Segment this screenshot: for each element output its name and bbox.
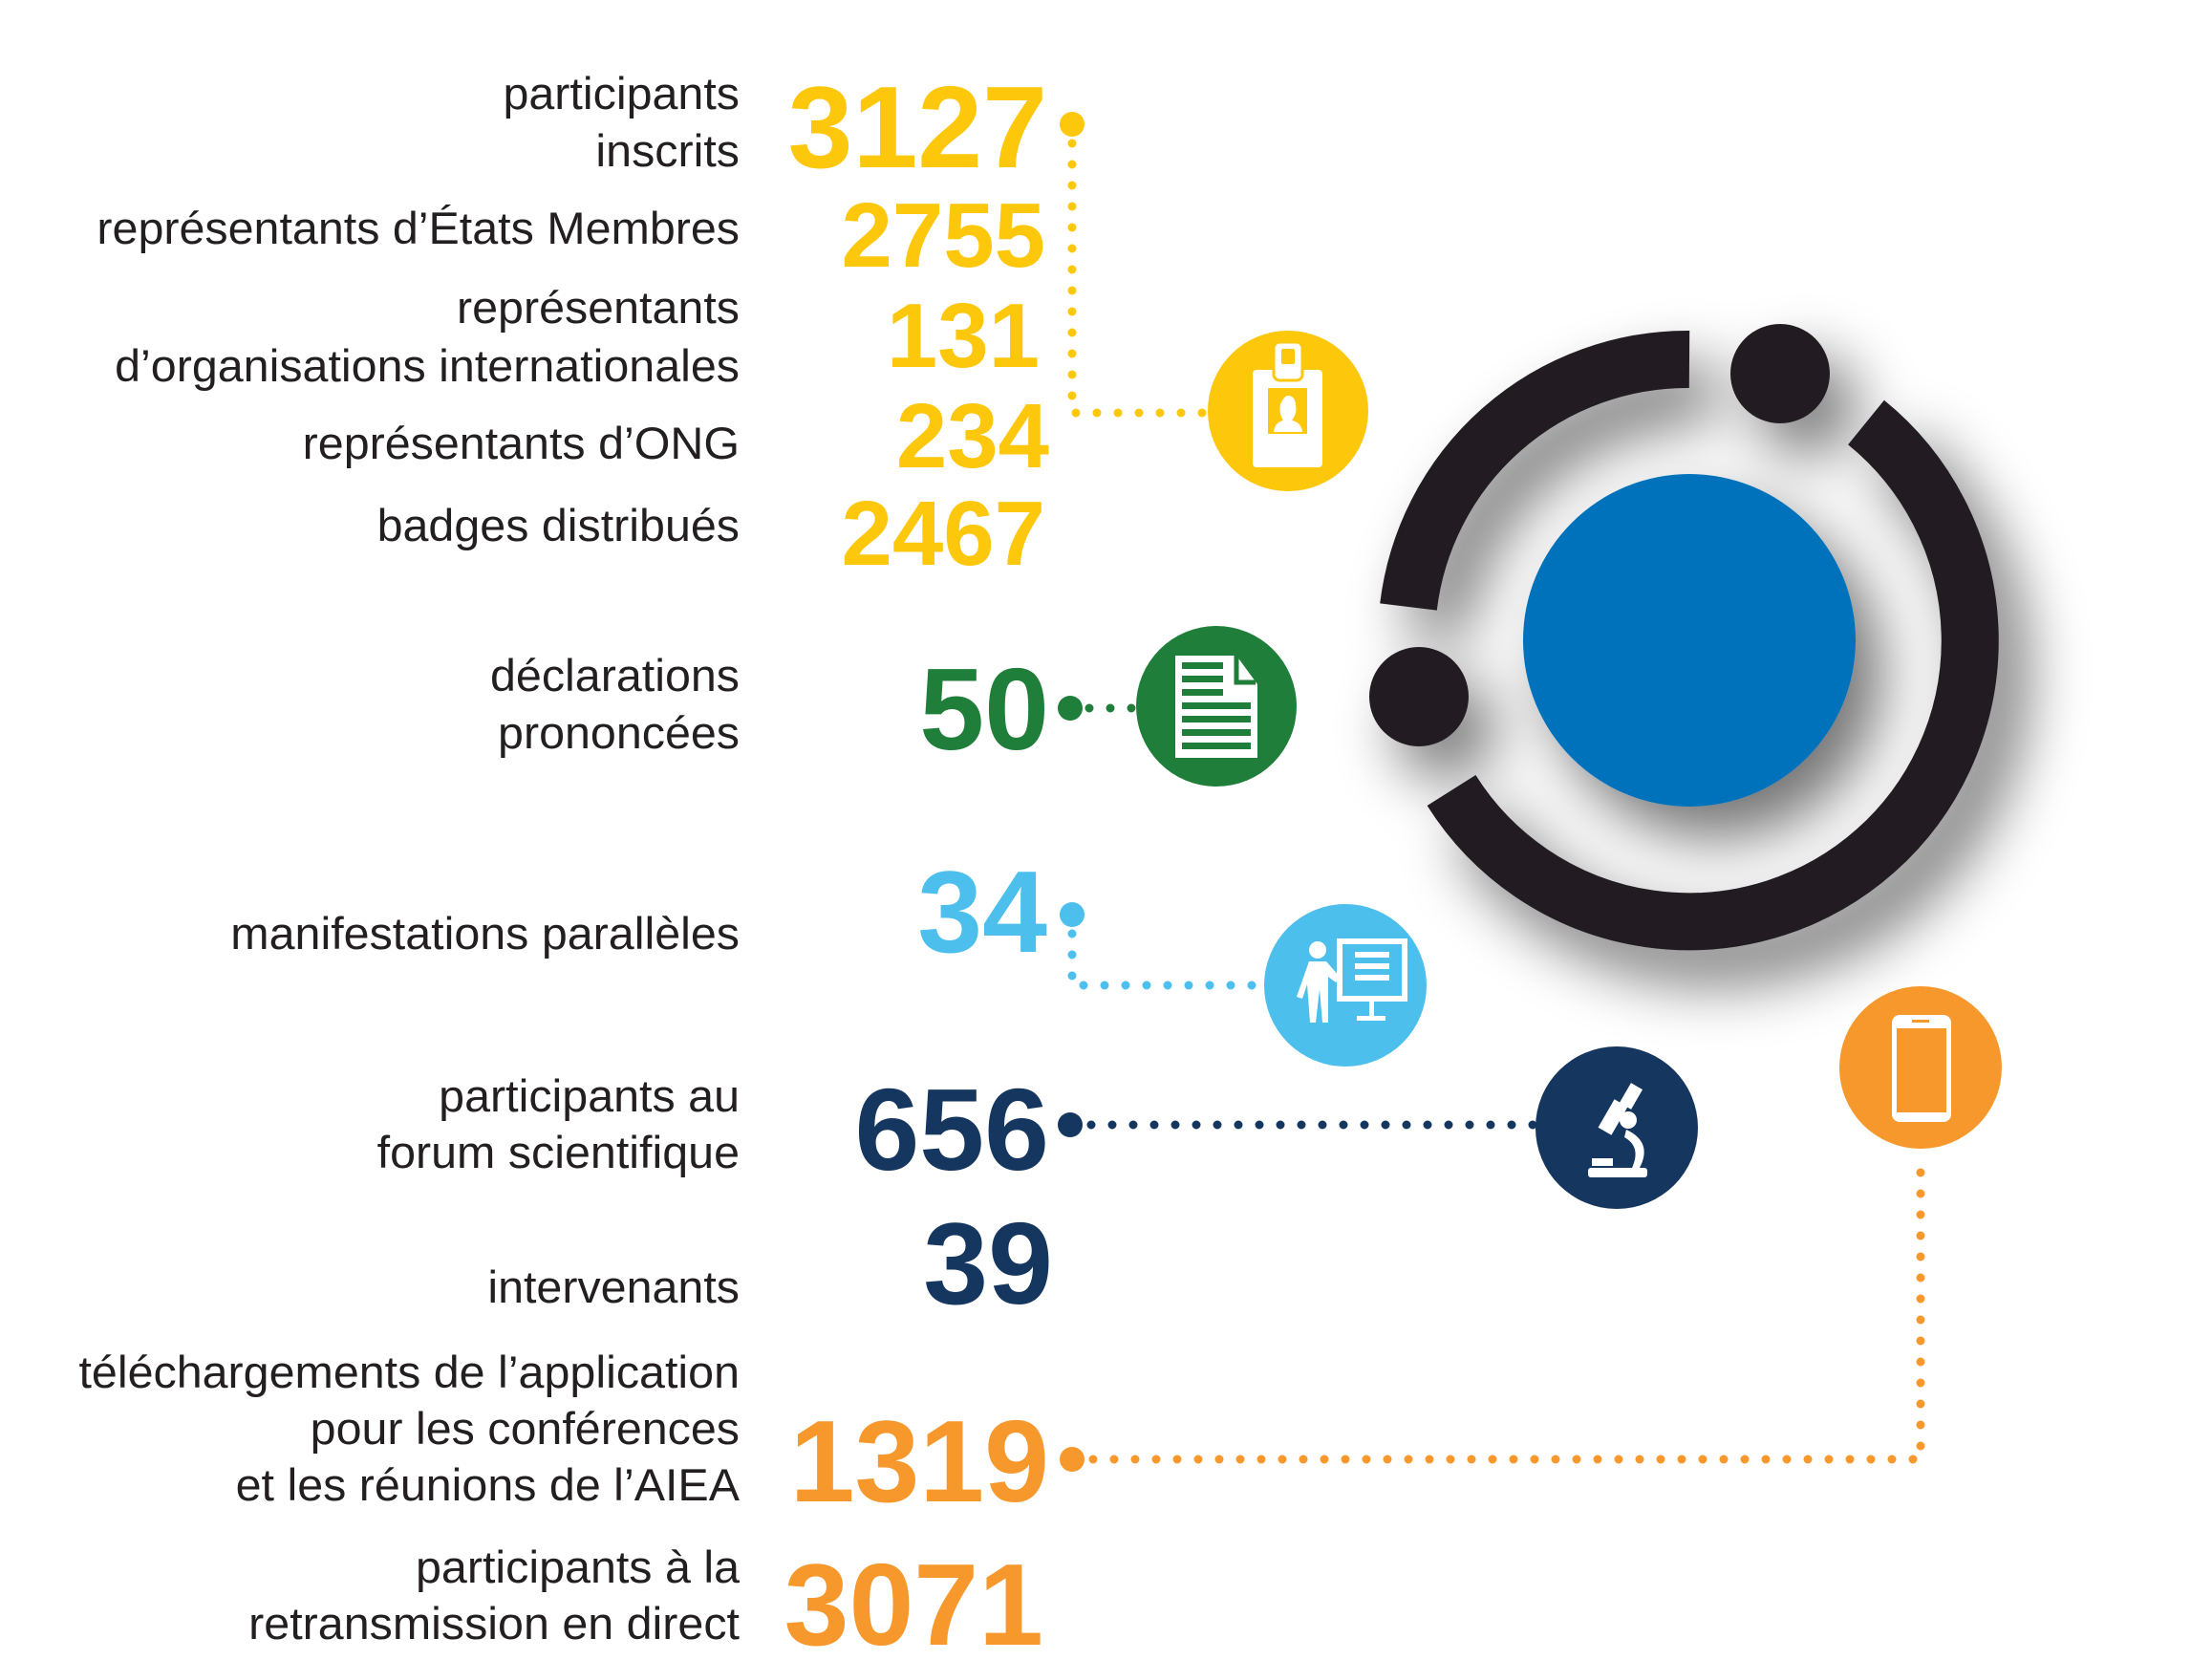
number: 2755: 2755 — [841, 184, 1045, 287]
number: 34: 34 — [917, 847, 1047, 977]
number: 656: 656 — [854, 1065, 1049, 1195]
label: téléchargements de l'application: pour les conférences — [311, 1405, 740, 1455]
label: représentants d'organisations internationales — [115, 284, 740, 392]
number: 3127: 3127 — [788, 62, 1047, 192]
label: représentants d'organisations internationales: d’organisations internationales — [115, 342, 740, 392]
label: participants inscrits: inscrits — [595, 127, 740, 177]
number: 1319: 1319 — [790, 1396, 1049, 1526]
connector: green — [1058, 696, 1137, 721]
number: 2467: 2467 — [841, 483, 1045, 585]
label: téléchargements de l'application — [78, 1348, 740, 1511]
label: téléchargements de l'application: téléchargements de l’application — [78, 1348, 740, 1398]
label: participants inscrits: participants — [503, 70, 740, 119]
blue center — [1523, 474, 1856, 807]
number: 39: 39 — [923, 1198, 1053, 1328]
dot left — [1369, 647, 1469, 746]
connector: navy — [1058, 1112, 1535, 1137]
label: participants au forum scientifique: participants au — [439, 1072, 740, 1122]
number: 50: 50 — [919, 644, 1049, 774]
label: badges distribués: badges distribués — [377, 502, 740, 551]
icon: smartphone (orange) — [1839, 986, 2002, 1149]
connector: orange — [1060, 1160, 1921, 1472]
label: déclarations prononcées — [490, 652, 740, 759]
number: 131: 131 — [887, 285, 1040, 387]
label: déclarations prononcées: prononcées — [498, 709, 740, 759]
label: participants à la retransmission en direct: participants à la — [416, 1543, 740, 1593]
label: intervenants: intervenants — [487, 1263, 740, 1313]
label: participants à la retransmission en direct: retransmission en direct — [248, 1600, 740, 1649]
label: participants à la retransmission en direct — [248, 1543, 740, 1649]
icon: presenter (light blue) — [1264, 904, 1427, 1067]
label: téléchargements de l'application: et les réunions de l’AIEA — [236, 1461, 740, 1511]
label: participants au forum scientifique: forum scientifique — [377, 1129, 740, 1178]
label: représentants d'ONG: représentants d’ONG — [303, 420, 740, 469]
label: manifestations parallèles: manifestations parallèles — [230, 910, 740, 959]
label: représentants d'États Membres: représentants d’États Membres — [97, 205, 740, 254]
label: représentants d'organisations internationales: représentants — [457, 284, 740, 334]
icon: microscope (navy) — [1536, 1046, 1698, 1209]
label: participants inscrits — [503, 70, 740, 177]
dot top — [1730, 324, 1830, 423]
label: déclarations prononcées: déclarations — [490, 652, 740, 701]
label: participants au forum scientifique — [377, 1072, 740, 1178]
icon: badge (yellow) — [1208, 331, 1368, 491]
arc right-bottom — [1451, 422, 1970, 921]
connector: yellow — [1060, 112, 1206, 413]
icon: document (green) — [1136, 626, 1297, 787]
number: 234: 234 — [896, 385, 1049, 487]
central ring graphic — [1369, 324, 1970, 921]
arc top-left — [1408, 359, 1689, 607]
connector: light blue — [1060, 902, 1266, 985]
